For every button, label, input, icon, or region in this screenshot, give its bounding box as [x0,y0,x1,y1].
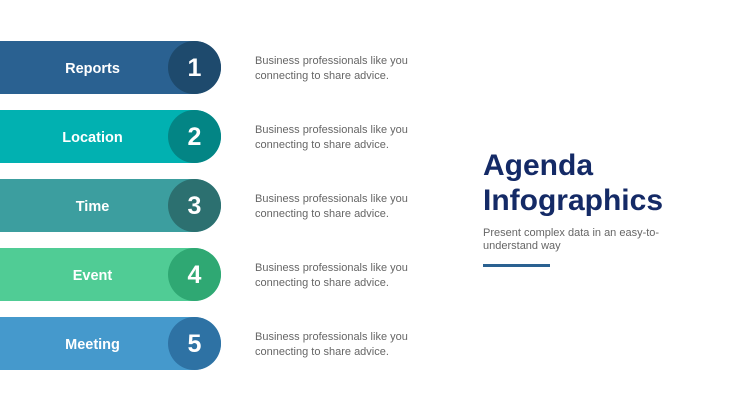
item 4: 4 [188,261,201,289]
title: Agenda [483,149,593,182]
item 1 [0,41,221,94]
desc 5: Business professionals like you [255,331,408,343]
desc 4 [255,262,408,289]
item 1: Reports [65,61,120,77]
item 3: 3 [188,192,201,220]
desc 4: Business professionals like you [255,262,408,274]
item 5: Meeting [65,337,120,353]
desc 5: connecting to share advice. [255,346,389,358]
subtitle: Present complex data in an easy-to- [483,227,659,239]
item 2: Location [62,130,123,146]
item 4 [0,248,221,301]
desc 3: Business professionals like you [255,193,408,205]
desc 1 [255,55,408,82]
subtitle [483,227,659,252]
item 2 [0,110,221,163]
item 3: Time [76,199,109,215]
desc 5 [255,331,408,358]
item 4: Event [73,268,112,284]
desc 3 [255,193,408,220]
underline [483,264,550,267]
desc 4: connecting to share advice. [255,277,389,289]
desc 3: connecting to share advice. [255,208,389,220]
item 1: 1 [188,54,201,82]
desc 2 [255,124,408,151]
desc 1: connecting to share advice. [255,70,389,82]
item 2: 2 [188,123,201,151]
item 3 [0,179,221,232]
subtitle: understand way [483,240,561,252]
desc 1: Business professionals like you [255,55,408,67]
item 5: 5 [188,330,201,358]
desc 2: Business professionals like you [255,124,408,136]
title [483,149,663,217]
item 5 [0,317,221,370]
title: Infographics [483,184,663,217]
desc 2: connecting to share advice. [255,139,389,151]
